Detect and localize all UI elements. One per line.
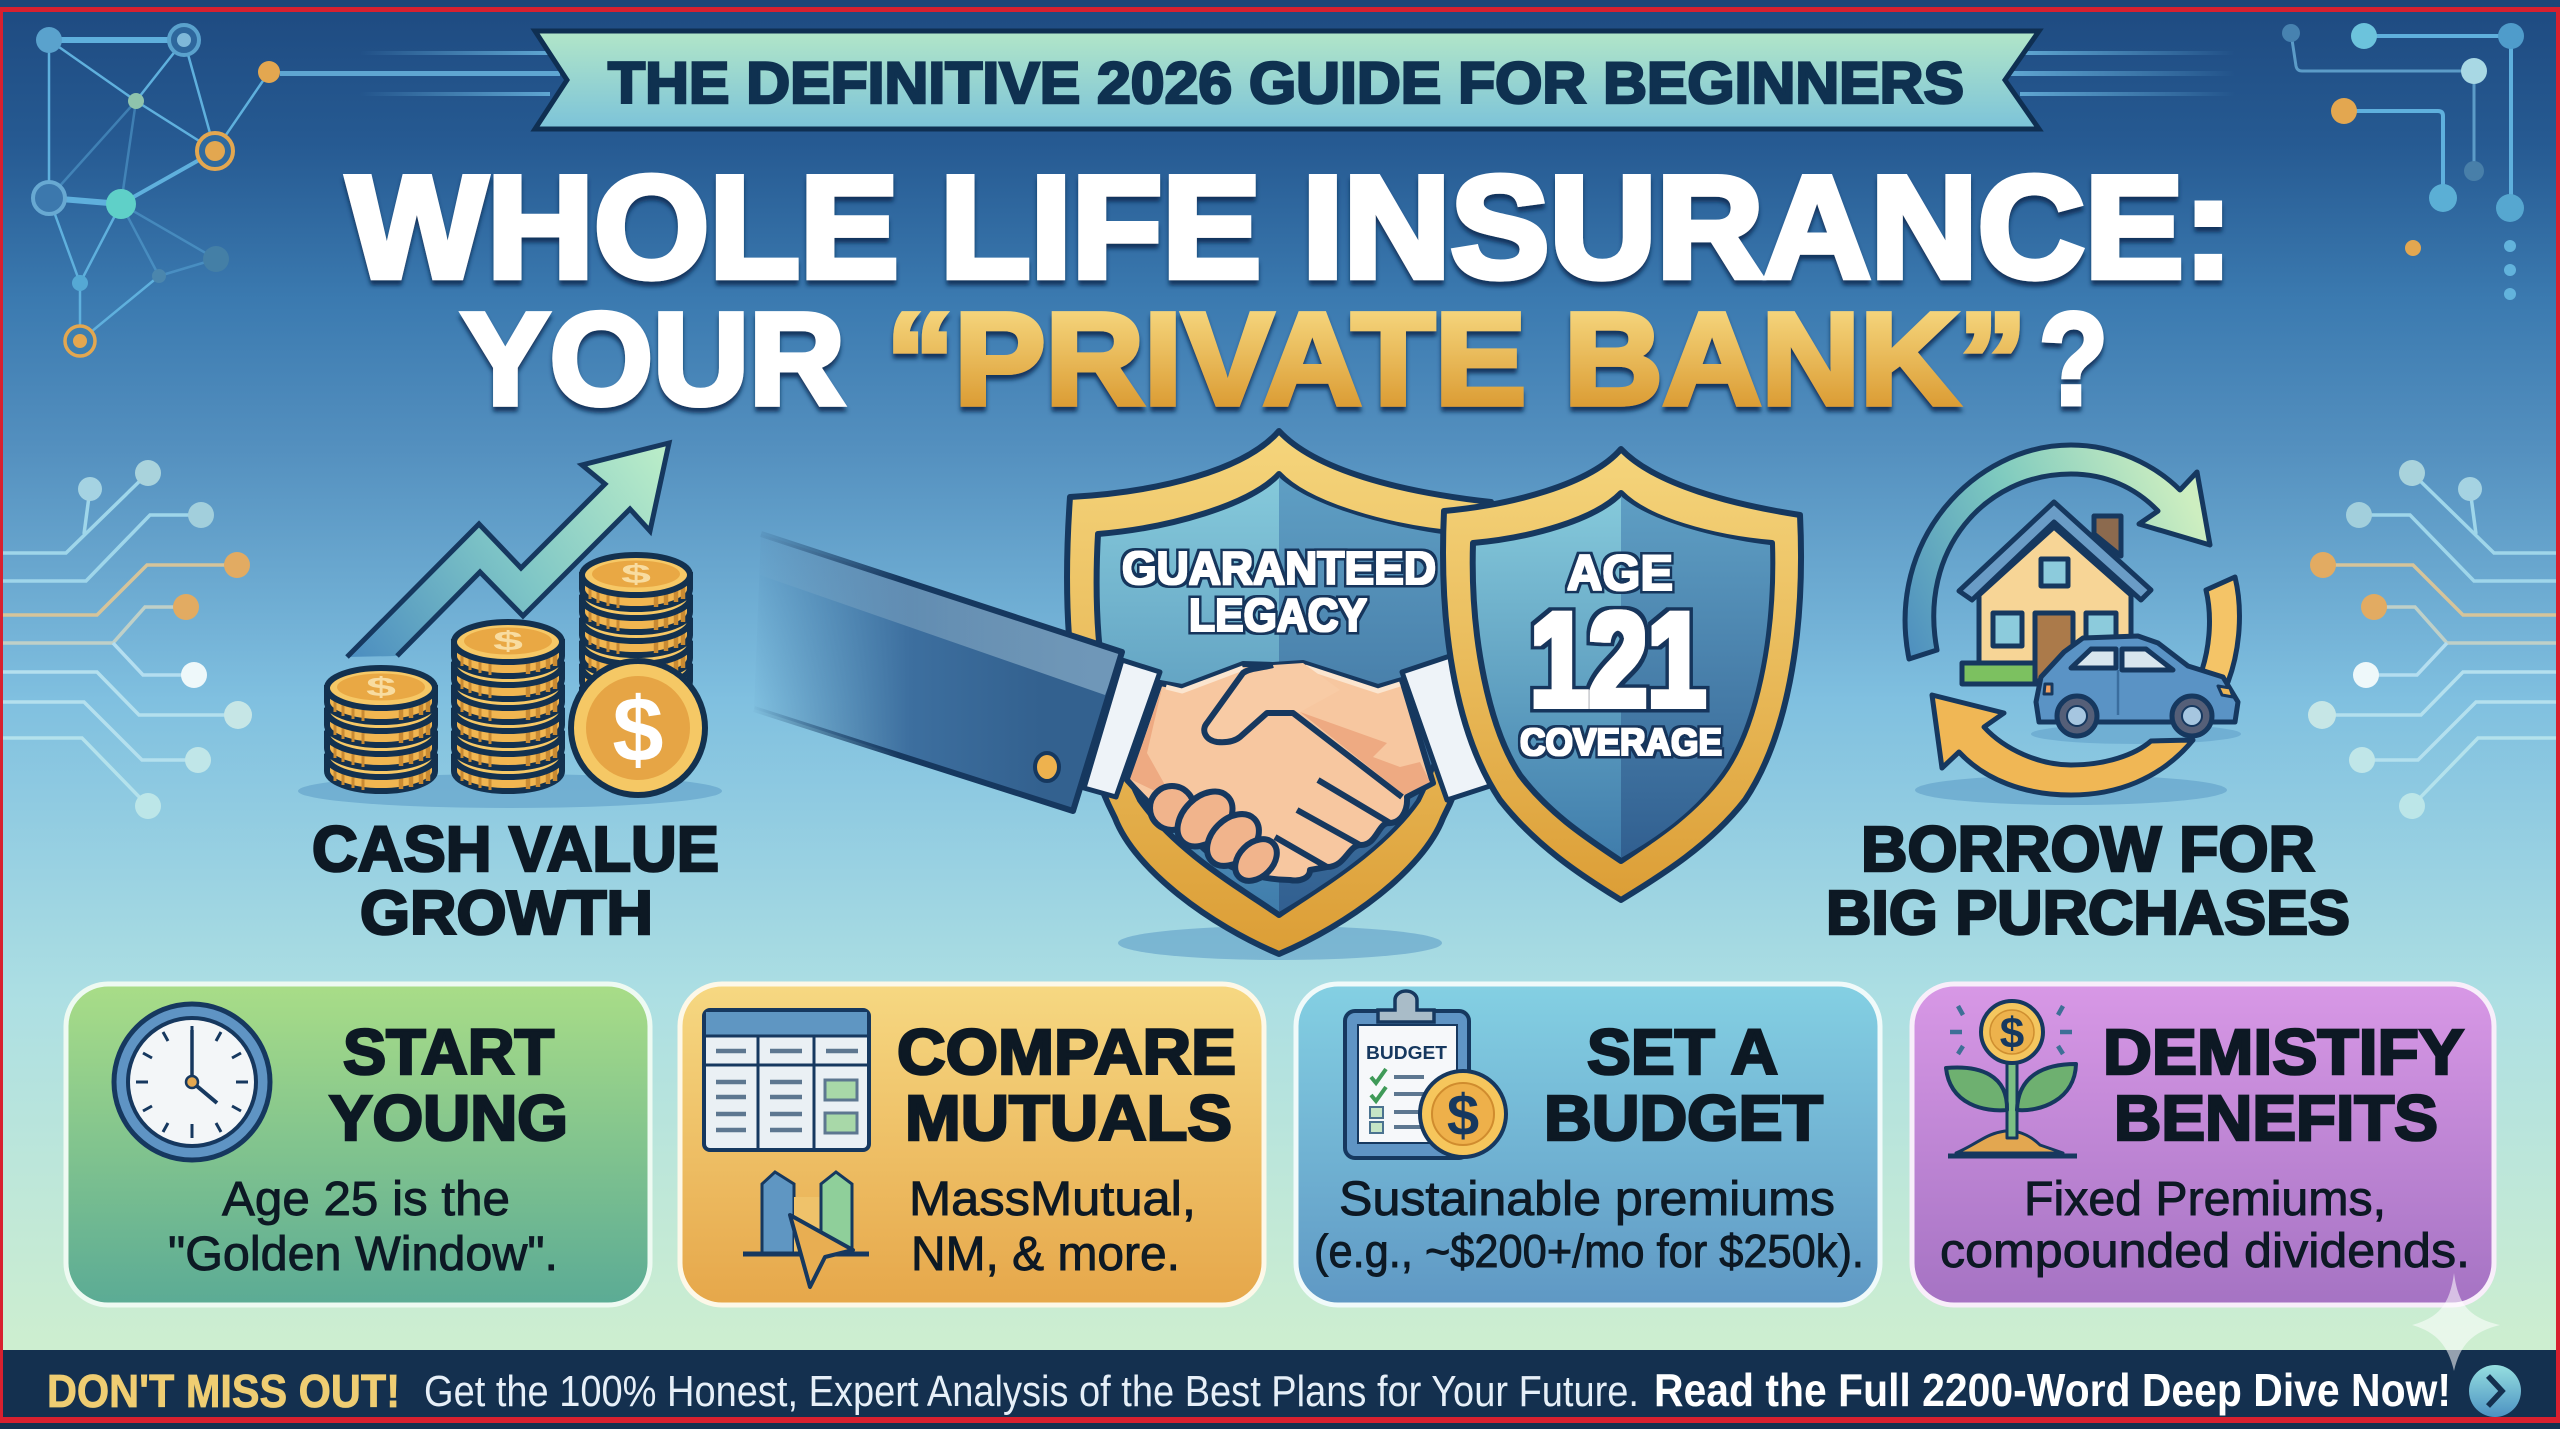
coin stack small: $ [366,672,396,702]
label: borrow for big purchases: BORROW FOR [1861,813,2315,885]
panel: compare mutuals [680,984,1264,1305]
left palm shade [1130,688,1165,792]
icon: money plant [1946,1001,2077,1156]
icon: budget clipboard with coin: BUDGET [1366,1043,1447,1063]
cta sentence: Get the 100% Honest, Expert Analysis of the Best Plans for Your Future. [424,1367,1639,1416]
heading: DEMISTIFY [2103,1016,2464,1088]
don't miss out: DON'T MISS OUT! [47,1365,400,1417]
panel: start young [66,984,650,1305]
coin stack tall [582,555,690,724]
panel: set a budget: (e.g., ~$200+/mo for $250k). [1314,1225,1864,1277]
thumb [1204,663,1340,742]
coin stack small [327,668,435,791]
clasped hands [1127,663,1433,889]
house [1959,502,2151,684]
heading: COMPARE [897,1016,1236,1088]
panel: set a budget: BUDGET [1544,1082,1823,1154]
car [2036,636,2238,736]
icon: money plant: $ [2000,1009,2024,1058]
main title [347,146,2233,432]
shield text coverage: COVERAGE [1520,722,1722,764]
circuit graphic top right [2282,23,2524,300]
body text: Sustainable premiums [1339,1173,1835,1226]
coin stack medium: $ [493,626,523,656]
icon: budget clipboard with coin [1345,991,1506,1158]
coin stack medium [454,622,562,791]
body text: Fixed Premiums, [2024,1173,2386,1226]
suit sleeve [754,534,1122,811]
panel: demistify benefits: BENEFITS [2114,1082,2438,1154]
green circular arrow [1905,445,2210,659]
icon: clock [114,1004,270,1160]
panel: start young: "Golden Window". [168,1228,558,1281]
heading: START [343,1016,554,1088]
orange arrow bottom [1932,695,2193,795]
illustration: handshake with shields [754,431,1801,960]
title line 1: WHOLE LIFE INSURANCE: [347,146,2233,308]
right hand shade [1300,712,1430,795]
label: borrow for big purchases [1826,813,2350,948]
icon: coins with rising arrow [298,443,722,808]
shield text: GUARANTEED [1122,542,1436,594]
shield: guaranteed legacy: LEGACY [1189,589,1367,641]
coin stack tall: $ [621,559,651,589]
body text: Age 25 is the [222,1173,510,1226]
left fingers [1150,786,1194,830]
heading: SET A [1587,1016,1778,1088]
shield: age 121 coverage [1443,449,1801,900]
orange arc right [2202,577,2239,682]
shield number 121: 121 [1530,586,1706,735]
shield text age: AGE [1567,545,1673,601]
label: borrow for big purchases: BIG PURCHASES [1826,879,2350,948]
panel: demistify benefits: compounded dividends. [1940,1225,2470,1278]
circuit lines right [2308,460,2557,819]
icon: house and car with circular arrows [1905,445,2241,805]
shield: guaranteed legacy [1067,431,1492,954]
title line 2: private bank: “PRIVATE BANK” [886,285,2027,432]
shirt cuffs [1084,656,1490,800]
body text: MassMutual, [909,1173,1196,1226]
top highlight [1166,667,1400,691]
panel: set a budget [1296,984,1880,1305]
banner title: THE DEFINITIVE 2026 GUIDE FOR BEGINNERS [608,51,1964,116]
label: cash value growth: GROWTH [360,879,653,948]
large dollar coin: $ [612,679,664,781]
read the full link: Read the Full 2200-Word Deep Dive Now! [1654,1364,2451,1416]
palm and right fingers [1127,663,1433,881]
title line 2: question mark: ? [2039,285,2108,432]
panel: start young: YOUNG [329,1082,568,1154]
panel: compare mutuals: MUTUALS [905,1082,1232,1154]
network graphic top left [33,25,280,356]
icon: comparison table [704,1010,869,1150]
sparkle watermark [2412,1273,2500,1371]
panel: compare mutuals: NM, & more. [911,1228,1180,1281]
banner with speed lines [280,31,2235,129]
label: cash value growth: CASH VALUE [312,813,719,885]
growth arrow [347,443,669,657]
panel: demistify benefits [1912,984,2494,1305]
large dollar coin [571,661,705,795]
icon: bars with cursor [743,1172,869,1287]
title line 2: your: YOUR [461,285,845,432]
circuit lines left [3,460,252,819]
icon: budget clipboard with coin: $ [1447,1083,1479,1148]
label: cash value growth [312,813,719,948]
icon: chevron button [2469,1365,2521,1417]
call to action bar [0,1350,2560,1429]
